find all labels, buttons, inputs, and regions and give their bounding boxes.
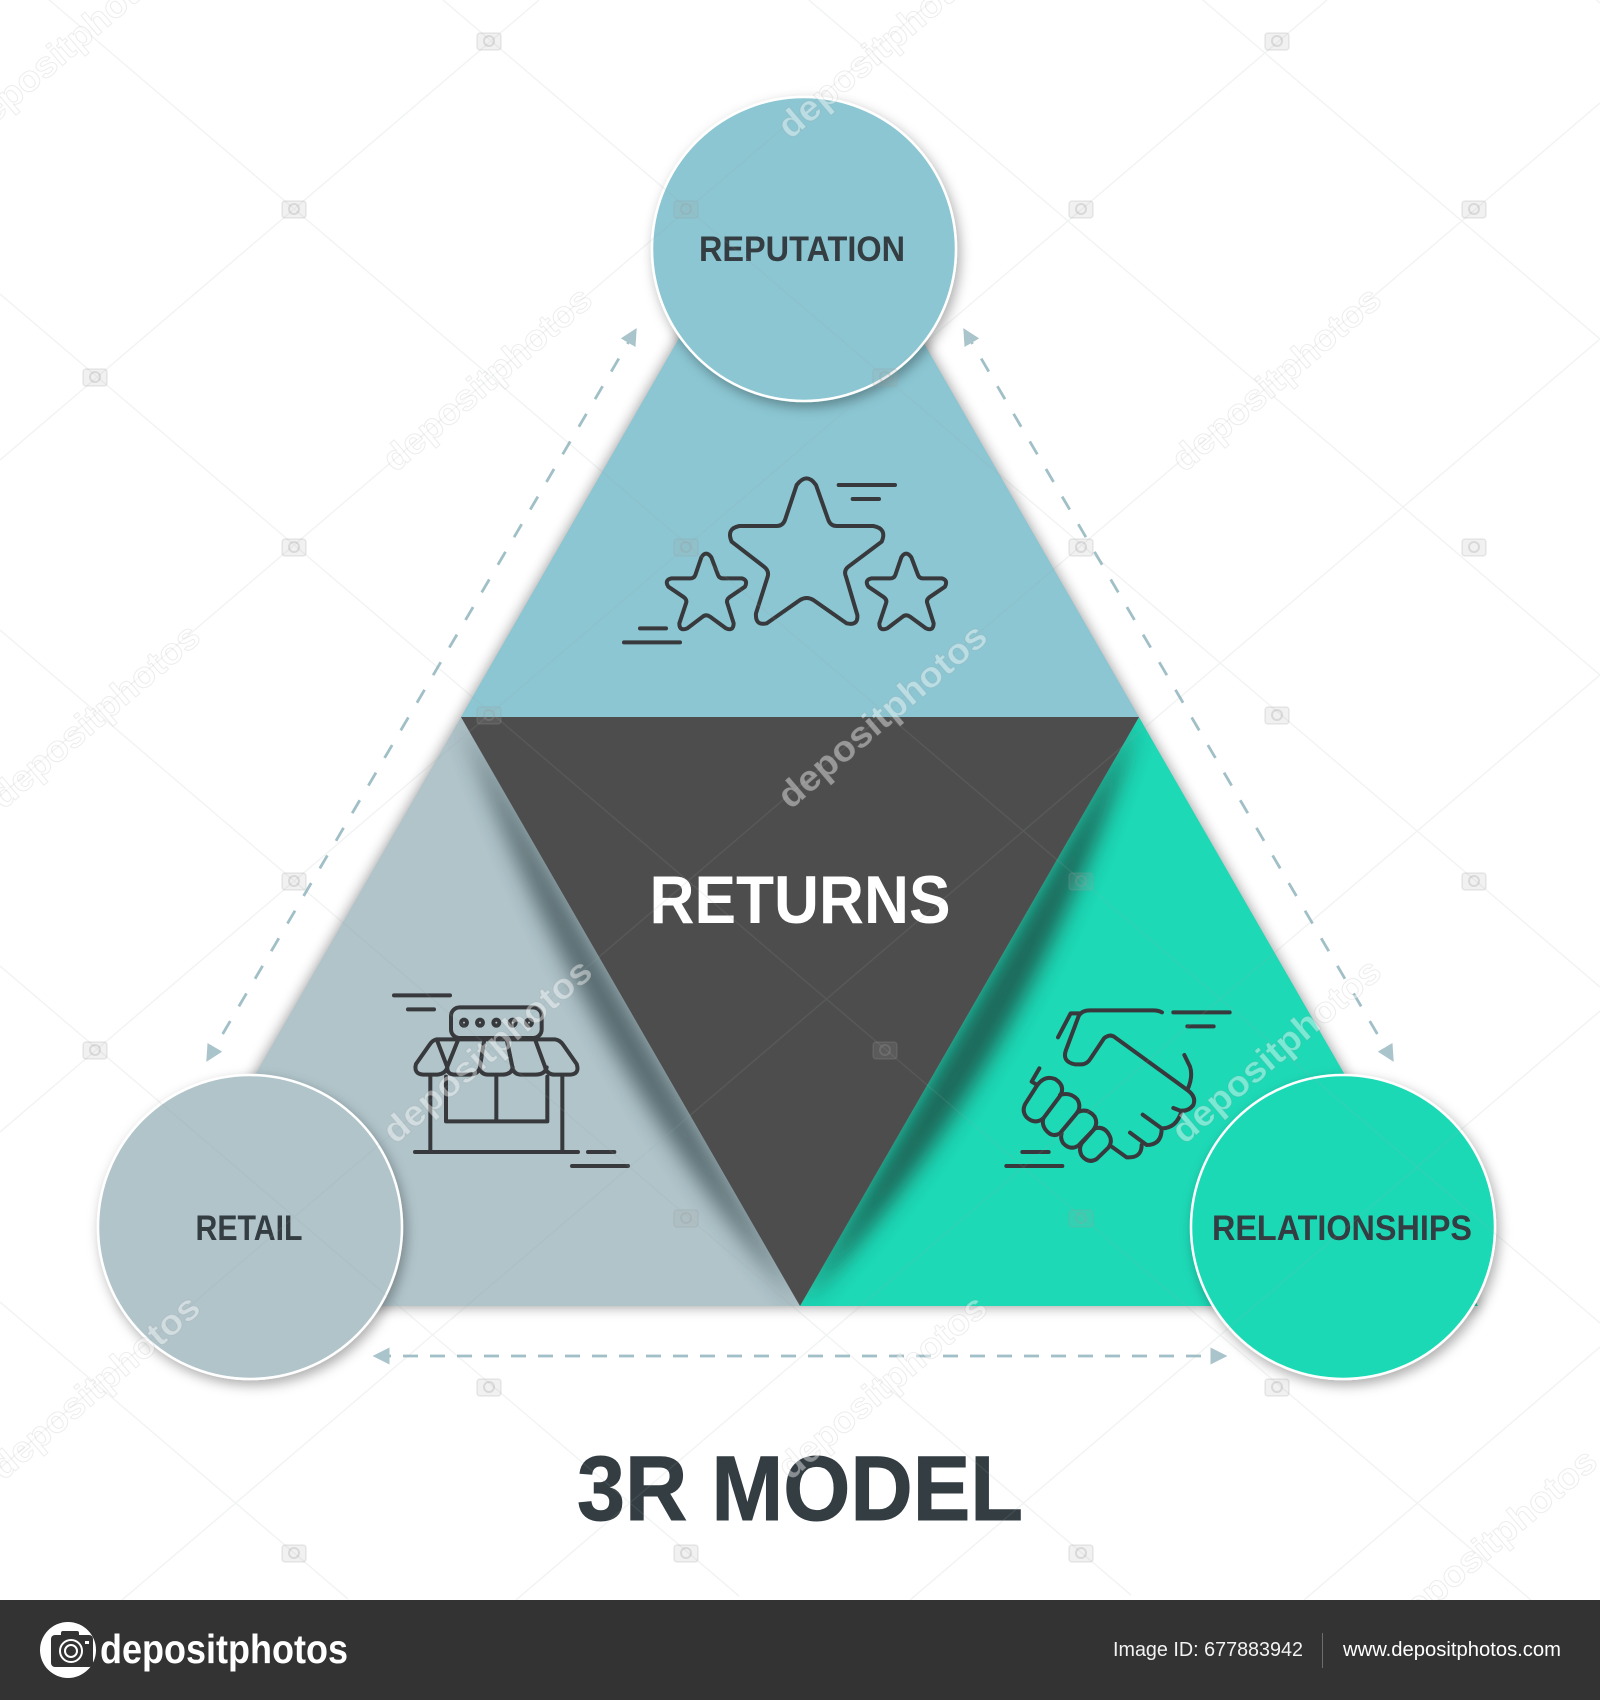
watermark overlay: depositphotos xyxy=(769,1286,995,1487)
label: retail: RETAIL xyxy=(196,1209,302,1248)
icon: storefront xyxy=(394,995,628,1166)
website url: www.depositphotos.com xyxy=(1342,1639,1561,1661)
watermark camera marks xyxy=(83,33,1486,1562)
circle: relationships xyxy=(1191,1075,1495,1379)
icon: three stars xyxy=(624,478,946,642)
watermark overlay: depositphotos xyxy=(1163,278,1389,479)
watermark overlay: depositphotos xyxy=(374,950,600,1151)
title: 3R MODEL xyxy=(577,1438,1023,1540)
arrow: reputation to retail xyxy=(208,331,635,1059)
label: relationships: RELATIONSHIPS xyxy=(1212,1209,1472,1248)
label: reputation: REPUTATION xyxy=(699,230,905,269)
heading: returns: RETURNS xyxy=(650,862,950,938)
watermark overlay: depositphotos xyxy=(769,615,995,816)
panel: reputation triangle xyxy=(461,128,1139,717)
panel: relationships triangle xyxy=(800,717,1478,1306)
circle: reputation xyxy=(652,97,956,401)
image id: Image ID: 677883942 xyxy=(1113,1639,1303,1661)
watermark overlay: depositphotos xyxy=(1163,950,1389,1151)
arrow: retail to relationships xyxy=(376,1355,1224,1357)
watermark overlay: depositphotos xyxy=(374,278,600,479)
circle: retail xyxy=(98,1075,402,1379)
panel: retail triangle xyxy=(256,718,800,1306)
triangle drop shadow xyxy=(122,128,1478,1306)
icon: depositphotos logo xyxy=(40,1622,96,1678)
panel: returns centre triangle xyxy=(461,717,1139,1306)
footer divider xyxy=(1322,1633,1323,1668)
watermark overlay: depositphotos xyxy=(1379,1440,1600,1641)
icon: handshake xyxy=(1006,1010,1230,1166)
arrow: reputation to relationships xyxy=(965,331,1392,1059)
footer bar xyxy=(0,1600,1600,1700)
logo wordmark: depositphotos xyxy=(100,1626,348,1672)
